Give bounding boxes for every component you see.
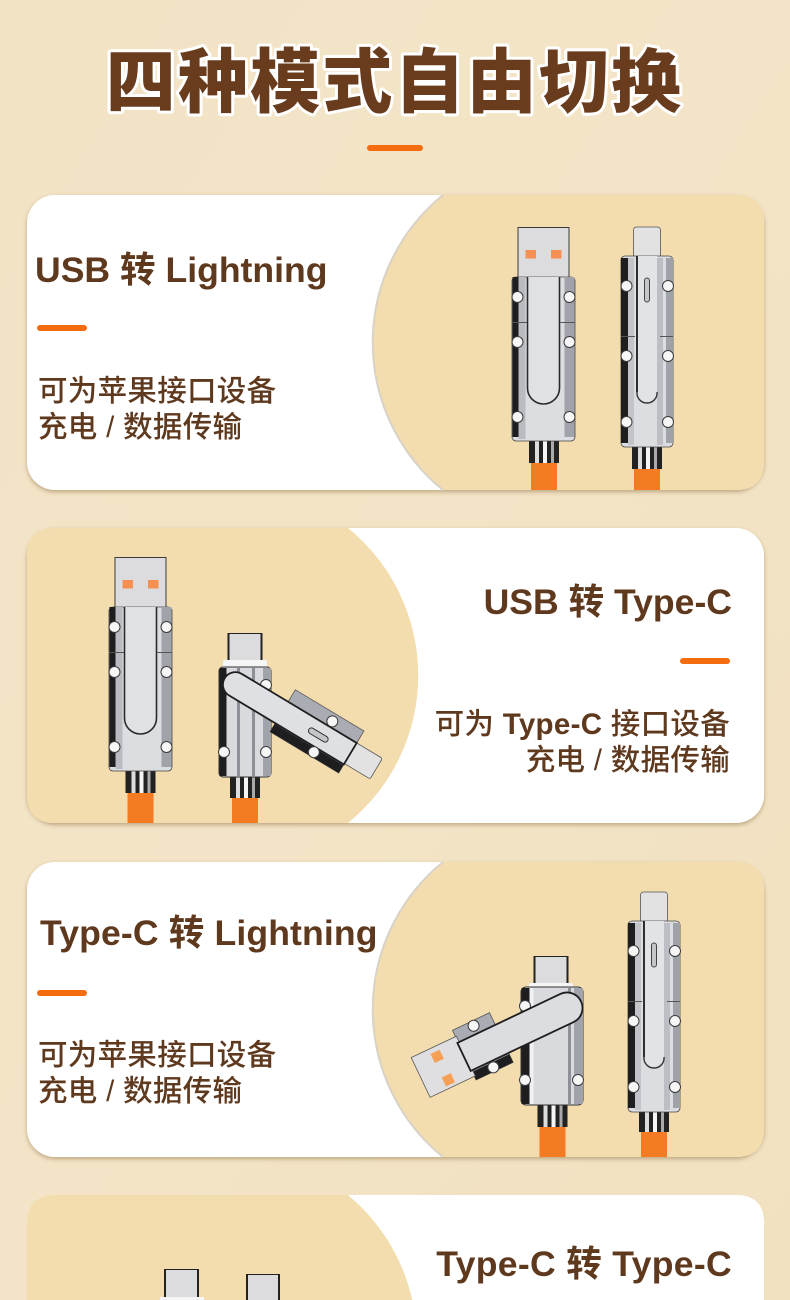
connector: right Type-C: [246, 1274, 280, 1300]
title accent bar: [367, 145, 423, 151]
accent bar: [37, 990, 87, 996]
card base: [27, 195, 764, 490]
accent bar: [680, 658, 730, 664]
connector: left Type-C: [160, 1269, 204, 1300]
panel: Type-C to Lightning: [24, 861, 766, 1162]
connector: Type-C with swivelled Lightning: [218, 633, 382, 823]
description: 可为 Type-C 接口设备: [435, 708, 730, 741]
panel: USB to Lightning: [24, 194, 767, 495]
description: 充电 / 数据传输: [38, 411, 242, 444]
title: 四种模式自由切换: [106, 44, 683, 122]
connector: Lightning: [628, 892, 681, 1157]
description: 充电 / 数据传输: [526, 744, 730, 777]
heading: USB 转 Type-C: [484, 582, 732, 622]
panel: USB to Type-C: [24, 527, 766, 828]
heading: Type-C 转 Lightning: [40, 913, 378, 953]
connector: USB: [108, 557, 172, 823]
connector: Lightning: [620, 226, 674, 490]
description: 充电 / 数据传输: [38, 1075, 242, 1108]
description: 可为苹果接口设备: [38, 375, 276, 408]
heading: USB 转 Lightning: [35, 250, 327, 290]
tan image area: [27, 1195, 412, 1300]
connector: USB: [512, 227, 576, 490]
connector: Type-C with swivelled USB: [410, 956, 584, 1157]
tan image area: [373, 862, 764, 1157]
card base: [27, 862, 764, 1157]
card base: [27, 1195, 764, 1300]
heading: Type-C 转 Type-C: [436, 1244, 732, 1284]
accent bar: [37, 325, 87, 331]
description: 可为苹果接口设备: [38, 1039, 276, 1072]
tan image area: [373, 195, 764, 490]
card base: [27, 528, 764, 823]
panel: Type-C to Type-C: [27, 1195, 764, 1300]
tan image area: [27, 528, 418, 823]
